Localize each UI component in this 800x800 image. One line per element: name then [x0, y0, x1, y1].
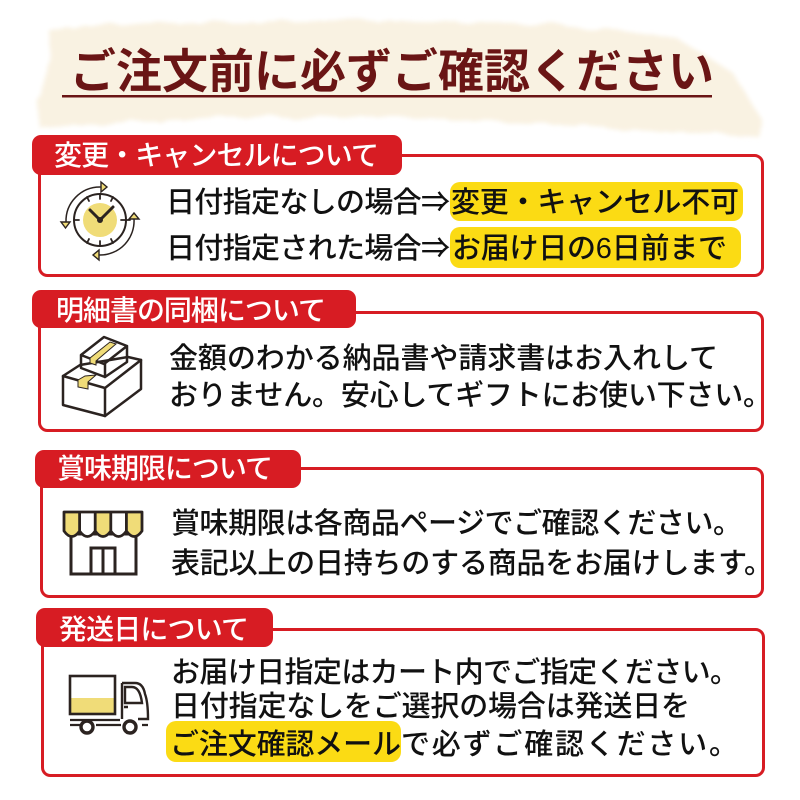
- panel: change and cancel: [32, 135, 762, 276]
- heading: best before: 賞味期限について: [57, 453, 273, 484]
- title: ご注文前に必ずご確認ください: [70, 45, 714, 98]
- panel: packing slip: [32, 290, 772, 430]
- heading: packing slip: 明細書の同梱について: [56, 295, 326, 326]
- icon: stacked boxes: [63, 337, 141, 416]
- text: no price documents: おりません。安心してギフトにお使い下さい。: [169, 379, 772, 412]
- heading: change and cancel: 変更・キャンセルについて: [54, 140, 379, 171]
- icon: delivery truck: [70, 676, 148, 733]
- text: please confirm: で必ずご確認ください。: [401, 728, 738, 761]
- text: best before details: [171, 507, 773, 580]
- panel: shipping date: [36, 608, 764, 776]
- heading: best before: [35, 450, 301, 488]
- panel: best before: [35, 450, 773, 596]
- text: shipping details: 日付指定なしをご選択の場合は発送日を: [171, 690, 690, 723]
- text: no delivery date specified: 日付指定なしの場合⇒: [166, 186, 450, 219]
- text: no price documents: [169, 342, 772, 412]
- highlight: change not possible: 変更・キャンセル不可: [451, 186, 739, 219]
- title band: brush background: [37, 20, 762, 137]
- highlight: until six days before: お届け日の6日前まで: [452, 232, 727, 265]
- icon: clock with arrows: [61, 182, 139, 260]
- text: best before details: 表記以上の日持ちのする商品をお届けします。: [171, 547, 773, 580]
- icon: storefront: [64, 512, 142, 574]
- text: delivery date specified: 日付指定された場合⇒: [166, 232, 450, 265]
- text: shipping details: お届け日指定はカート内でご指定ください。: [171, 656, 739, 689]
- heading: shipping date: [36, 608, 273, 647]
- heading: change and cancel: [32, 135, 402, 175]
- text: shipping details: [171, 656, 739, 723]
- text: best before details: 賞味期限は各商品ページでご確認ください。: [171, 507, 742, 540]
- heading: shipping date: 発送日について: [59, 614, 249, 645]
- heading: packing slip: [32, 290, 356, 328]
- text: no price documents: 金額のわかる納品書や請求書はお入れして: [169, 342, 718, 375]
- highlight: order confirmation email: ご注文確認メール: [170, 728, 401, 761]
